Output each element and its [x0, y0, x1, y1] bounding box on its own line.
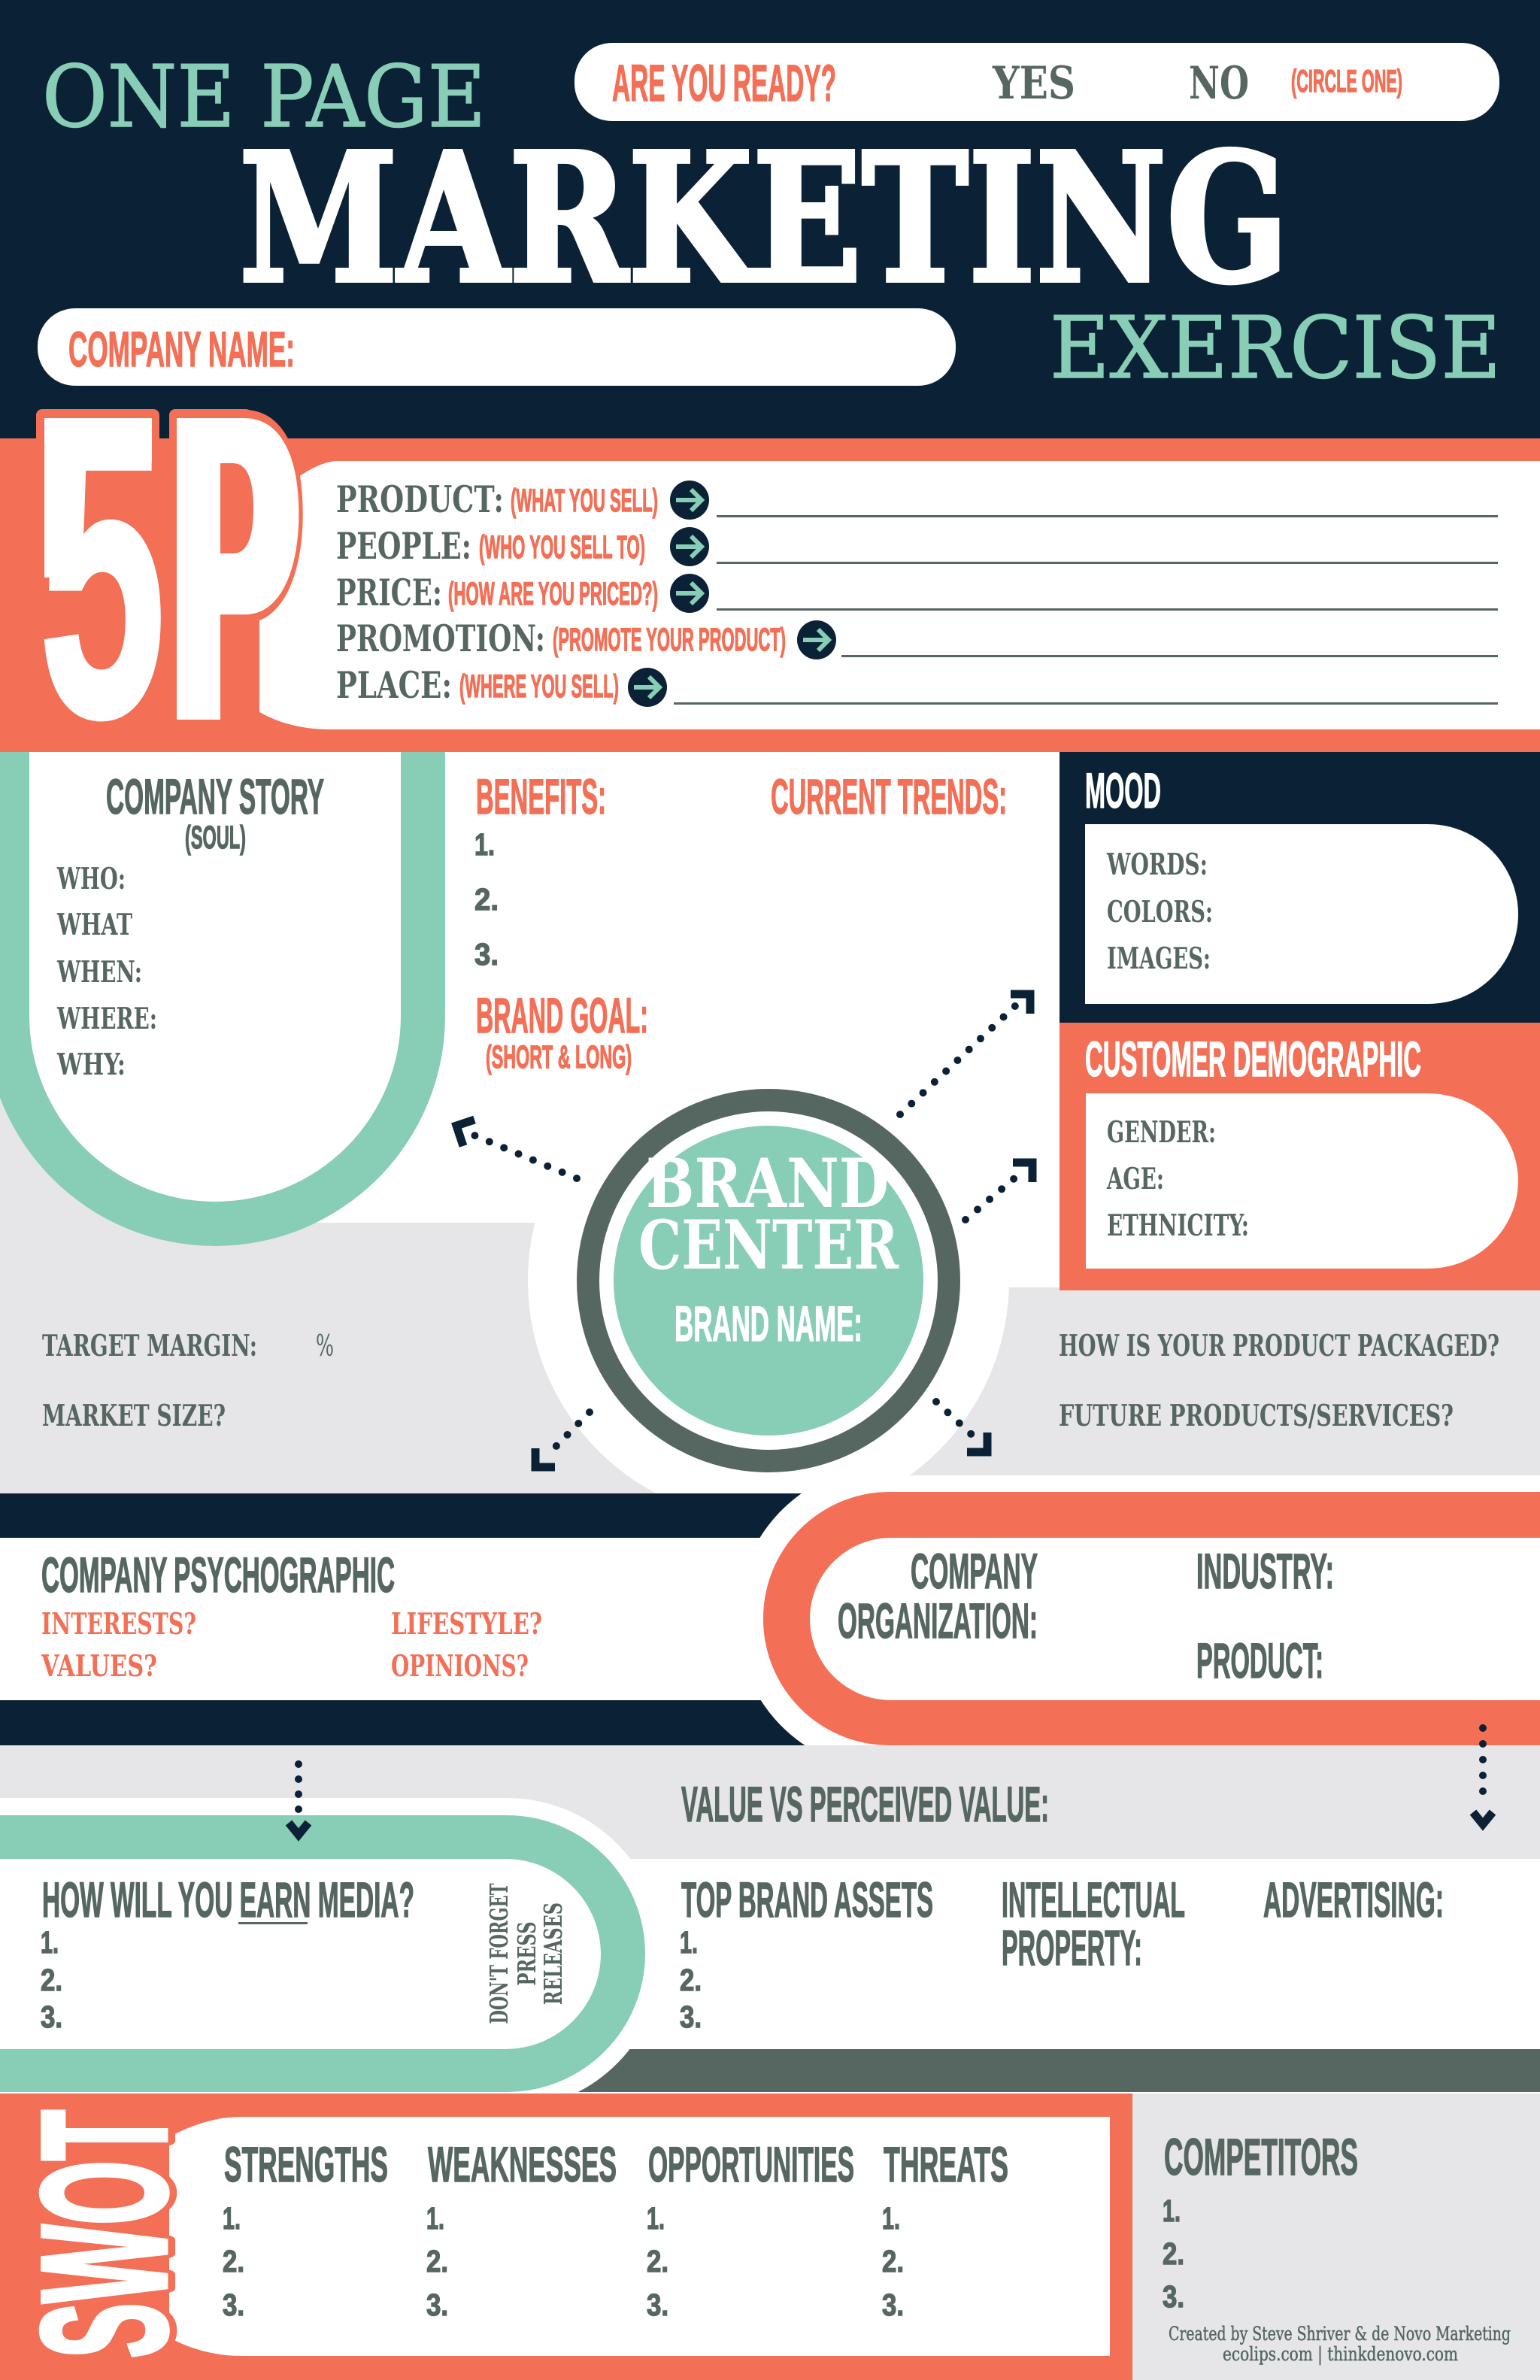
- row: people: [336, 524, 1498, 568]
- panel: company organization: [752, 1492, 1540, 1775]
- row: price: [336, 571, 1498, 614]
- column: strengths: 2.: [223, 2244, 244, 2278]
- chart: brand center circle: BRAND NAME:: [675, 1296, 862, 1351]
- row: place: [336, 663, 1498, 707]
- title: marketing: MARKETING: [239, 114, 1289, 323]
- panel: mood: [1060, 752, 1540, 1023]
- panel: customer demographic: GENDER:: [1107, 1115, 1216, 1150]
- row: product: PRODUCT:: [336, 478, 504, 521]
- row: price: PRICE:: [336, 571, 442, 614]
- panel: company psychographic: VALUES?: [41, 1649, 157, 1684]
- panel: mood: IMAGES:: [1107, 941, 1211, 976]
- text block: don't forget press releases: DON'T FORGET: [484, 1883, 514, 2024]
- panel: company story: WHERE:: [56, 1002, 157, 1036]
- row: product: (WHAT YOU SELL): [511, 483, 658, 519]
- text block: target margin: [42, 1329, 334, 1433]
- column: threats: [882, 2136, 1008, 2322]
- text block: target margin: %: [316, 1329, 334, 1363]
- panel: header: [0, 0, 1540, 438]
- text block: don't forget press releases: [484, 1883, 568, 2024]
- chart: brand center circle: CENTER: [638, 1205, 899, 1285]
- column: weaknesses: [426, 2136, 617, 2322]
- panel: customer demographic: [1060, 1023, 1540, 1290]
- text: BRAND GOAL:: [476, 987, 648, 1043]
- text block: target margin: MARKET SIZE?: [42, 1399, 226, 1433]
- heading: one page: ONE PAGE: [42, 47, 486, 147]
- panel: value vs perceived value band: [0, 1745, 1540, 1859]
- row: promotion: (PROMOTE YOUR PRODUCT): [553, 622, 786, 658]
- panel: brand assets row: 2.: [680, 1963, 702, 1997]
- panel: customer demographic: AGE:: [1106, 1162, 1164, 1196]
- heading: 5P: 5: [39, 333, 165, 804]
- text block: brand goal: (SHORT & LONG): [486, 1039, 632, 1075]
- chart: brand center circle: [577, 1089, 960, 1472]
- row: promotion: PROMOTION:: [336, 617, 545, 660]
- panel: are you ready: [574, 43, 1499, 121]
- row: price: (HOW ARE YOU PRICED?): [448, 576, 658, 612]
- text block: benefits: 3.: [474, 937, 499, 972]
- text block: target margin: TARGET MARGIN:: [42, 1329, 257, 1363]
- column: opportunities: 2.: [647, 2244, 668, 2278]
- panel: earn media: 2.: [41, 1963, 62, 1997]
- arrow: to demographic: [966, 1163, 1032, 1220]
- column: weaknesses: WEAKNESSES: [428, 2136, 617, 2192]
- panel: 5P: P: [165, 326, 305, 811]
- panel: customer demographic: ETHNICITY:: [1107, 1208, 1249, 1243]
- text: CURRENT TRENDS:: [771, 769, 1007, 824]
- column: weaknesses: 2.: [426, 2244, 448, 2278]
- column: strengths: [223, 2136, 388, 2322]
- text block: benefits: 1.: [474, 827, 495, 862]
- column: weaknesses: 3.: [426, 2288, 448, 2322]
- panel: company psychographic: OPINIONS?: [391, 1649, 529, 1684]
- panel: earn media: 1.: [41, 1925, 59, 1960]
- panel: 5P: P: [165, 326, 305, 811]
- panel: 5P: [0, 326, 1540, 811]
- panel: company psychographic: COMPANY PSYCHOGRAPHIC: [41, 1547, 395, 1602]
- arrow: to mood: [900, 994, 1030, 1114]
- row: promotion: [336, 617, 1498, 660]
- text block: credits: ecolips.com | thinkdenovo.com: [1223, 2343, 1458, 2366]
- panel: competitors: 1.: [1163, 2194, 1181, 2228]
- row: people: PEOPLE:: [336, 524, 471, 568]
- panel: company story: [0, 752, 445, 1246]
- panel: brand assets row: INTELLECTUAL: [1002, 1872, 1185, 1927]
- heading: exercise: EXERCISE: [1050, 299, 1501, 398]
- panel: company name: COMPANY NAME:: [68, 321, 295, 377]
- text block: don't forget press releases: PRESS: [512, 1922, 541, 1985]
- panel: earn media: 3.: [41, 2000, 62, 2034]
- panel: competitors: [1132, 2093, 1540, 2380]
- panel: are you ready: (CIRCLE ONE): [1291, 63, 1402, 99]
- panel: mood: MOOD: [1085, 763, 1161, 818]
- panel: competitors: 3.: [1163, 2279, 1184, 2314]
- row: product: [336, 478, 1498, 521]
- column: weaknesses: 1.: [426, 2201, 444, 2236]
- arrow: down to value: [1473, 1728, 1493, 1824]
- panel: earn media: HOW WILL YOU EARN MEDIA?: [42, 1872, 414, 1927]
- panel: brand assets row: 1.: [680, 1925, 698, 1960]
- text block: credits: [1169, 2323, 1511, 2366]
- panel: are you ready: ARE YOU READY?: [612, 54, 836, 112]
- text block: brand goal: [476, 987, 648, 1075]
- chart: brand center circle: BRAND: [646, 1144, 889, 1223]
- panel: mood: WORDS:: [1106, 847, 1208, 882]
- panel: are you ready: NO: [1189, 57, 1249, 110]
- panel: company story: WHAT: [56, 908, 132, 942]
- column: opportunities: 3.: [647, 2288, 668, 2322]
- row: place: (WHERE YOU SELL): [459, 669, 619, 705]
- column: strengths: STRENGTHS: [224, 2136, 388, 2192]
- text block: don't forget press releases: RELEASES: [538, 1902, 568, 2005]
- text block: benefits: [474, 769, 606, 972]
- panel: company psychographic: INTERESTS?: [41, 1607, 196, 1642]
- panel: company organization: COMPANY: [911, 1543, 1038, 1599]
- panel: brand assets row: TOP BRAND ASSETS: [681, 1872, 933, 1927]
- panel: company story: COMPANY STORY: [106, 769, 324, 824]
- arrow: to brand goal: [456, 1120, 577, 1178]
- panel: earn media: [0, 1815, 645, 2092]
- text: BENEFITS:: [476, 769, 606, 824]
- text block: benefits: 2.: [474, 882, 499, 917]
- panel: brand assets row: 3.: [680, 2000, 702, 2034]
- arrow: to product questions: [936, 1402, 987, 1452]
- panel: company psychographic: LIFESTYLE?: [391, 1607, 542, 1642]
- panel: grey brand metrics background: [0, 1040, 1540, 1521]
- panel: competitors: COMPETITORS: [1164, 2128, 1358, 2186]
- row: people: (WHO YOU SELL TO): [479, 529, 645, 565]
- panel: value vs perceived value band: VALUE VS PERCEIVED VALUE:: [681, 1776, 1049, 1832]
- panel: brand assets row: [526, 1872, 1540, 2092]
- panel: swot: [0, 2093, 1132, 2380]
- column: opportunities: 1.: [647, 2201, 665, 2236]
- column: threats: THREATS: [884, 2136, 1008, 2192]
- text: SWOT: [5, 2110, 204, 2358]
- panel: company organization: INDUSTRY:: [1196, 1543, 1334, 1599]
- panel: company story: WHO:: [56, 862, 126, 896]
- column: opportunities: OPPORTUNITIES: [648, 2136, 854, 2192]
- column: strengths: 1.: [223, 2201, 241, 2236]
- panel: company psychographic: [0, 1493, 827, 1745]
- panel: company story: WHEN:: [56, 955, 142, 990]
- column: strengths: 3.: [223, 2288, 244, 2322]
- row: place: PLACE:: [336, 663, 452, 707]
- panel: company name: [38, 308, 956, 386]
- panel: brand assets row: PROPERTY:: [1002, 1920, 1142, 1975]
- panel: are you ready: YES: [992, 57, 1075, 110]
- panel: mood: COLORS:: [1107, 895, 1213, 929]
- arrow: to target margin: [535, 1412, 590, 1467]
- panel: company organization: ORGANIZATION:: [838, 1593, 1038, 1648]
- text: SWOT: [5, 2110, 204, 2358]
- column: opportunities: [647, 2136, 854, 2322]
- heading: swot: [5, 2110, 204, 2358]
- panel: competitors: 2.: [1163, 2236, 1184, 2271]
- column: threats: 2.: [882, 2244, 904, 2278]
- arrow: down to earn media: [289, 1764, 308, 1835]
- text block: product questions: [1059, 1329, 1499, 1433]
- panel: company story: WHY:: [56, 1048, 126, 1082]
- column: threats: 1.: [882, 2201, 900, 2236]
- panel: company organization: PRODUCT:: [1196, 1633, 1323, 1688]
- panel: company story: (SOUL): [185, 820, 246, 856]
- column: threats: 3.: [882, 2288, 904, 2322]
